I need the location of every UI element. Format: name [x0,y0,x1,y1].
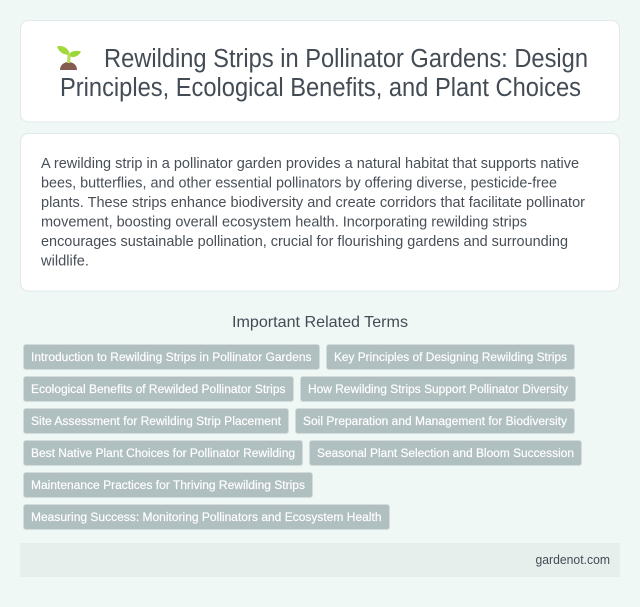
text block: description: plants. These strips enhance biodiversity and create corridors that facilitate pollinator [41,195,585,211]
text block: description [40,156,585,270]
text block: description: bees, butterflies, and other essential pollinators by offering diverse, pesticide-free [41,176,557,192]
title: Principles, Ecological Benefits, and Plant Choices [60,74,581,102]
tag: measuring success: Measuring Success: Monitoring Pollinators and Ecosystem Health [31,510,382,524]
tag: pollinator diversity: How Rewilding Strips Support Pollinator Diversity [308,382,569,396]
panel: description [20,134,620,291]
text block: description: encourages sustainable pollination, crucial for flourishing gardens and surrounding [41,234,568,250]
icon: sprout [57,46,81,70]
tag group: related terms [24,344,582,530]
tag: ecological benefits: Ecological Benefits of Rewilded Pollinator Strips [31,382,286,396]
tag: soil preparation: Soil Preparation and Management for Biodiversity [303,414,568,428]
tag: native plants: Best Native Plant Choices for Pollinator Rewilding [31,446,295,460]
tag: key principles [326,344,574,370]
panel: title card [20,20,620,122]
tag: ecological benefits [24,376,294,402]
tag: maintenance [24,472,312,498]
tag: site assessment [24,408,288,434]
title [60,45,588,102]
text block: description: wildlife. [40,254,89,270]
tag: soil preparation [296,408,574,434]
tag: site assessment: Site Assessment for Rewilding Strip Placement [31,414,282,428]
text block: description: movement, boosting overall ecosystem health. Incorporating rewilding strips [41,214,527,230]
tag: measuring success [24,504,390,530]
text block: description: A rewilding strip in a pollinator garden provides a natural habitat that supports native [41,156,579,172]
title: Rewilding Strips in Pollinator Gardens: Design [104,45,588,73]
tag: maintenance: Maintenance Practices for Thriving Rewilding Strips [31,478,305,492]
tag: introduction [24,344,320,370]
footer [20,543,620,577]
tag: key principles: Key Principles of Designing Rewilding Strips [334,350,567,364]
heading: related terms: Important Related Terms [232,314,408,331]
tag: seasonal plants: Seasonal Plant Selection and Bloom Succession [317,446,574,460]
tag: pollinator diversity [300,376,576,402]
tag: introduction: Introduction to Rewilding Strips in Pollinator Gardens [31,350,312,364]
tag: seasonal plants [310,440,582,466]
tag: native plants [24,440,302,466]
footer: gardenot.com [536,552,610,567]
